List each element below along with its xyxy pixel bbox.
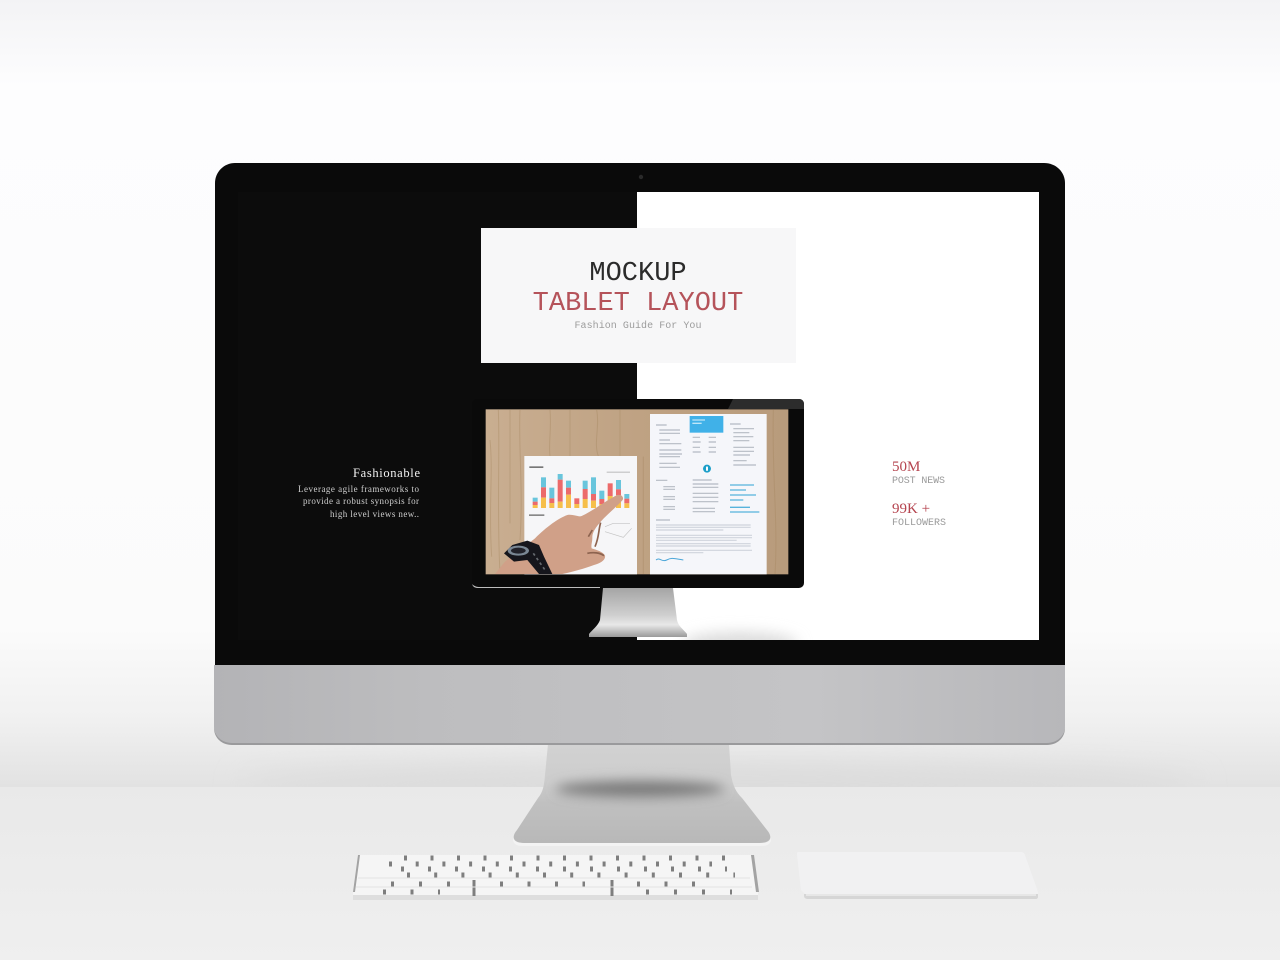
wristwatch — [504, 541, 552, 574]
resume signature — [656, 558, 683, 561]
heading: Fashionable: Fashionable — [353, 466, 420, 480]
mini monitor stand — [589, 588, 797, 640]
monitor bezel — [215, 163, 1065, 665]
mini monitor screen photo — [486, 409, 788, 574]
monitor stand — [513, 744, 771, 846]
stat: 50M: 50M — [892, 459, 920, 475]
resume skill bars — [730, 485, 759, 512]
title line two: TABLET LAYOUT — [533, 289, 743, 319]
title line one: MOCKUP — [589, 259, 687, 289]
resume paragraph lines — [656, 525, 752, 553]
mini monitor frame — [472, 399, 804, 588]
resume blue header — [690, 416, 723, 433]
body copy: provide a robust synopsis for — [303, 496, 419, 506]
hand pointing — [495, 495, 623, 574]
monitor chin — [214, 665, 1065, 744]
label: followers: FOLLOWERS — [892, 518, 946, 529]
resume icon — [703, 465, 711, 473]
keyboard — [353, 855, 759, 900]
resume left column text — [656, 424, 756, 520]
stat: 99K+: 99K + — [892, 501, 930, 517]
screen right white half — [637, 192, 1039, 640]
body copy: Leverage agile frameworks to — [298, 484, 420, 494]
chart paper — [524, 456, 637, 574]
camera — [639, 175, 643, 179]
subtitle: Fashion Guide For You — [574, 320, 702, 332]
trackpad — [797, 852, 1038, 899]
screen left black half — [238, 192, 637, 640]
keyboard key gaps — [383, 858, 735, 896]
title card — [481, 228, 796, 363]
mini monitor — [472, 399, 804, 588]
stacked bar chart — [533, 474, 629, 508]
keyboard body — [353, 855, 758, 899]
body copy: high level views new.. — [330, 509, 419, 519]
frame highlight — [728, 399, 804, 409]
wood background — [486, 409, 788, 574]
monitor: large desktop display — [214, 163, 1065, 745]
resume paper — [650, 414, 767, 574]
right statistics — [892, 459, 946, 529]
left text block — [298, 466, 420, 519]
label: post news: POST NEWS — [892, 476, 945, 487]
